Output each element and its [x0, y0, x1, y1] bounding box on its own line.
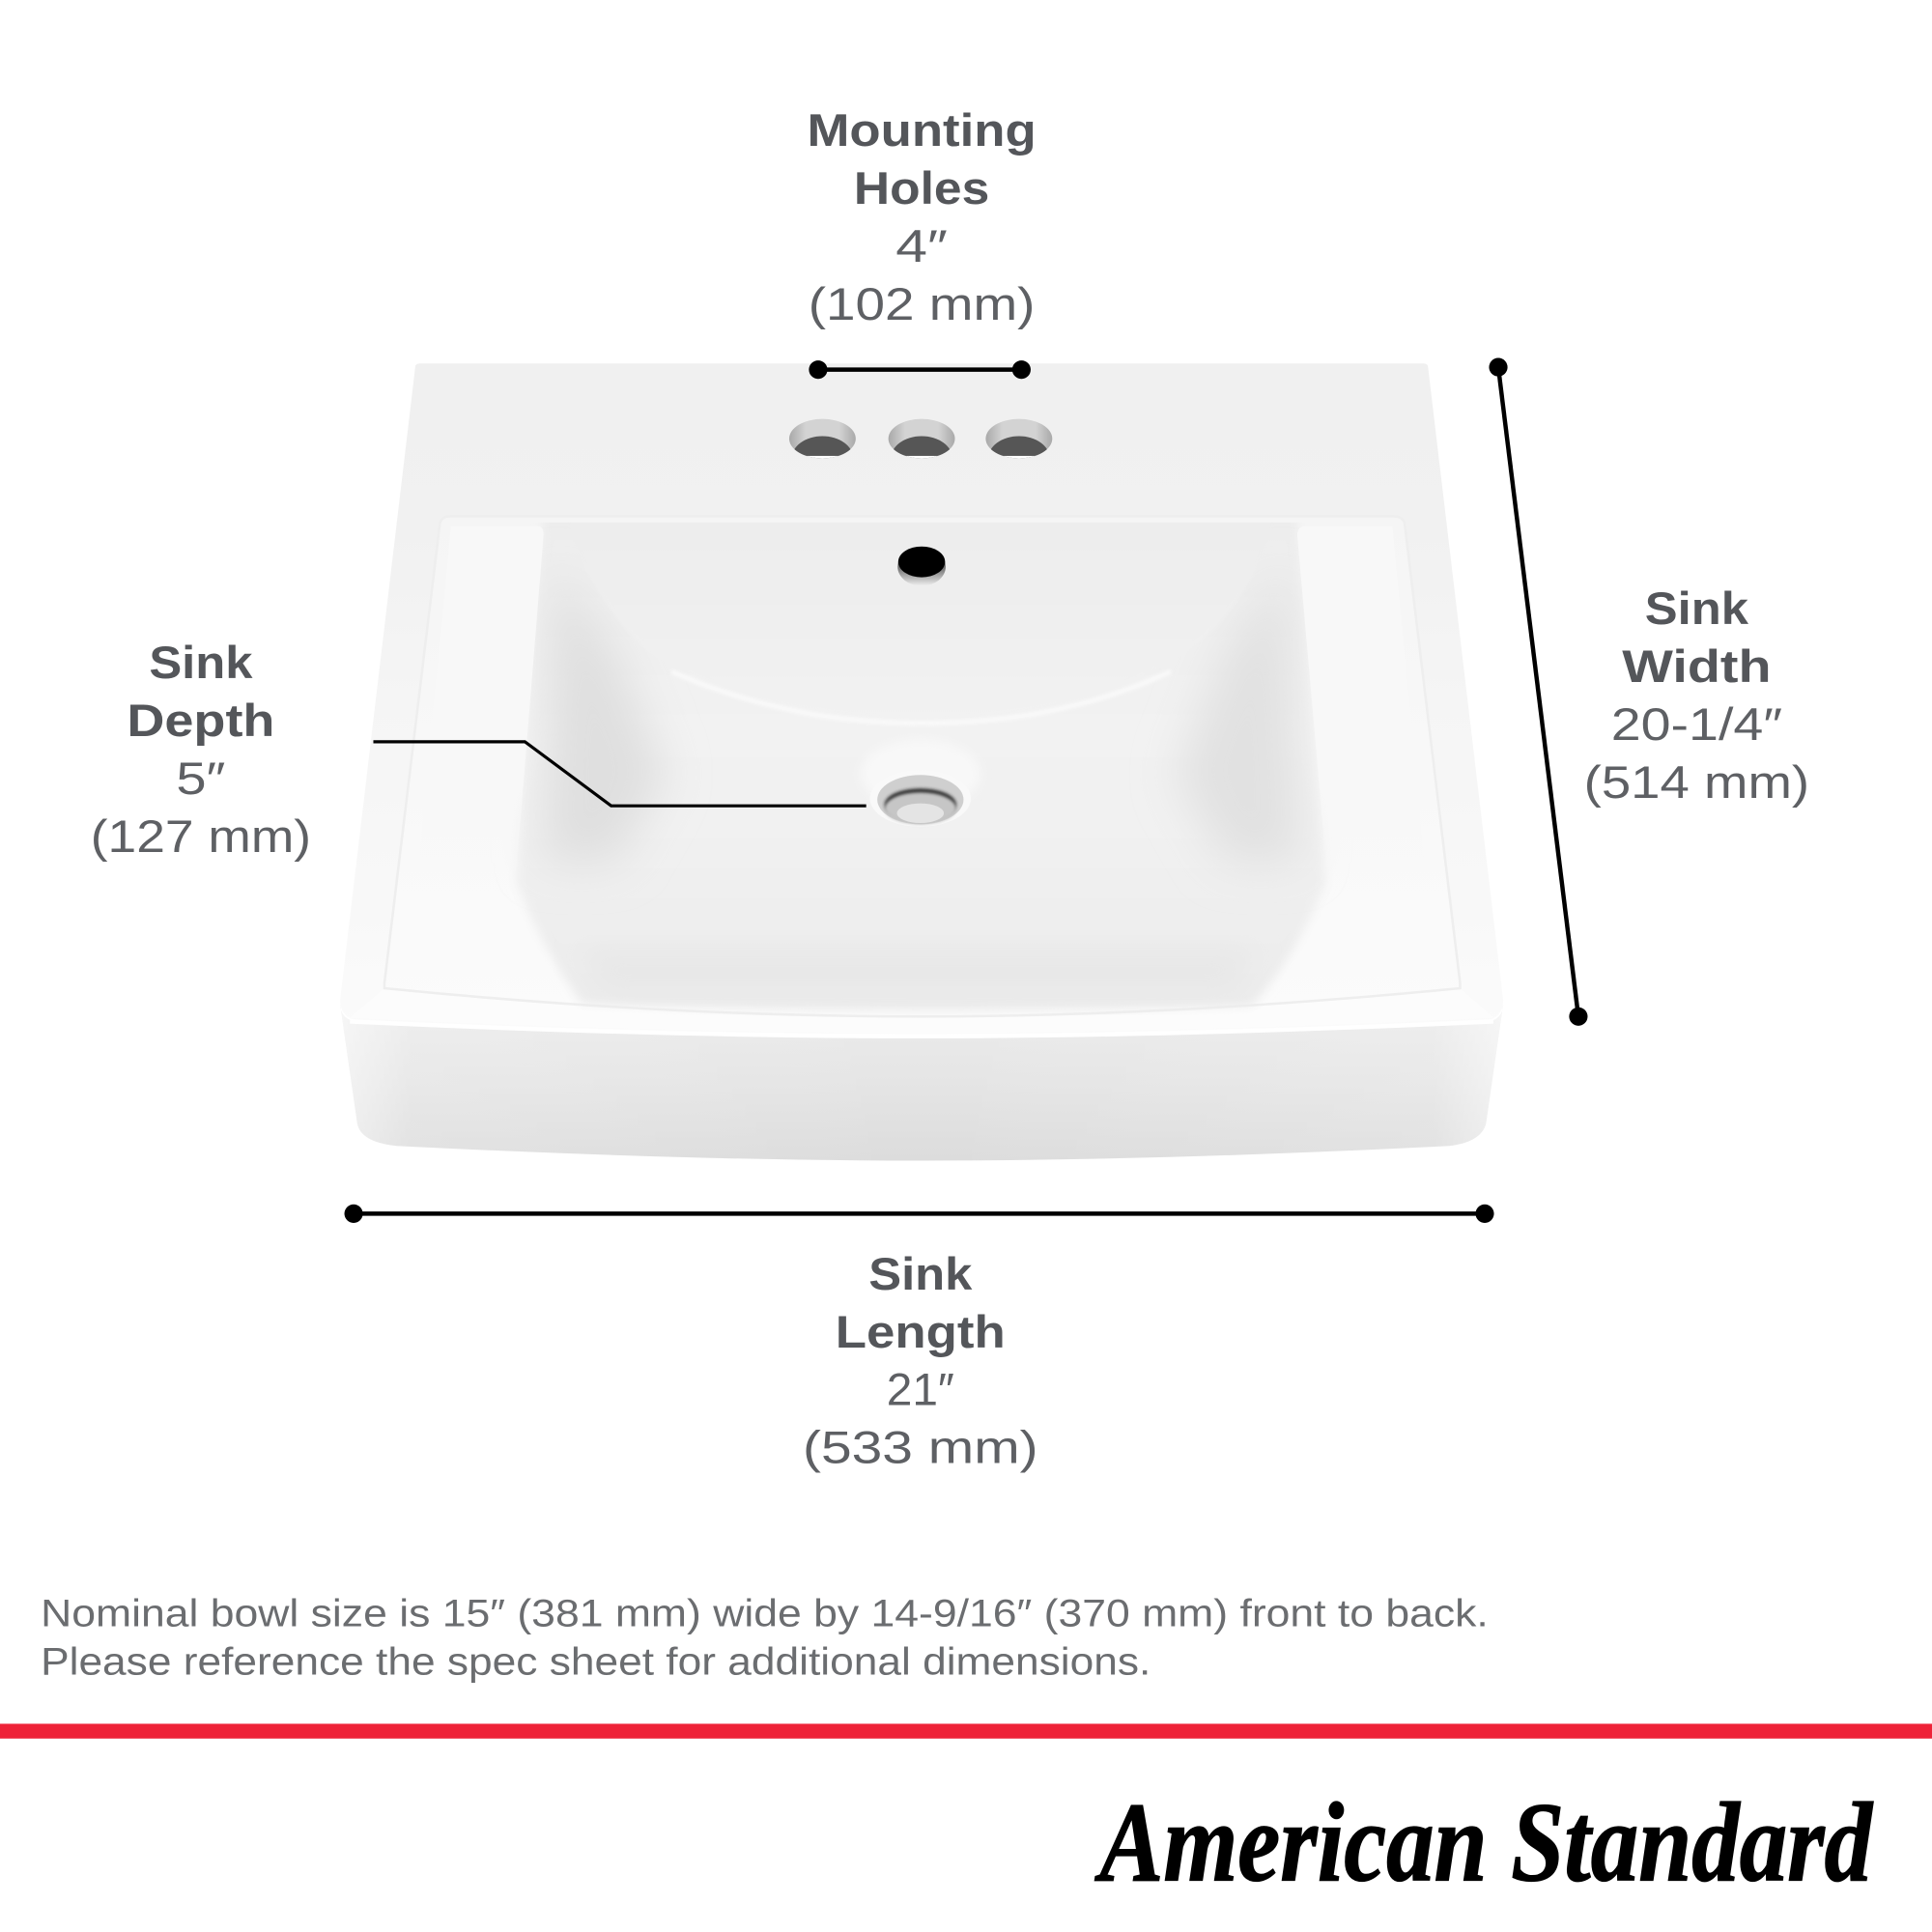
mounting hole left [789, 419, 856, 458]
back lip highlight [414, 381, 1430, 384]
recessed rim [384, 516, 1460, 1016]
label: sink depth: 5″ [176, 753, 225, 805]
mounting hole right [985, 419, 1053, 458]
red divider bar [0, 1723, 1932, 1739]
label: mounting holes: (102 mm) [809, 279, 1035, 330]
drain [860, 739, 980, 827]
back of bowl [560, 505, 1282, 720]
top rim highlight [443, 517, 1403, 521]
sink front face [340, 1005, 1503, 1161]
label: mounting holes: 4″ [895, 221, 948, 272]
footnote [41, 1593, 1489, 1683]
footnote: Nominal bowl size is 15″ (381 mm) wide by 14-9/16″ (370 mm) front to back. [41, 1593, 1489, 1635]
label: sink depth: Depth [127, 696, 274, 747]
overflow hole [897, 547, 946, 586]
label: sink length: (533 mm) [803, 1423, 1038, 1474]
label: sink depth [91, 638, 311, 863]
label: sink length: 21″ [887, 1365, 954, 1416]
dimension line: sink length [345, 1205, 1494, 1223]
label: sink depth: (127 mm) [91, 811, 311, 863]
dimension line: sink width [1489, 358, 1587, 1026]
label: sink depth: Sink [149, 638, 253, 689]
front rim highlight [350, 1021, 1493, 1037]
label: sink width: Width [1622, 641, 1772, 693]
label: sink width: Sink [1645, 583, 1749, 635]
label: sink width: 20-1/4″ [1611, 699, 1782, 751]
label: mounting holes [807, 105, 1037, 330]
mounting hole centre [889, 419, 954, 458]
right ledge top [1297, 526, 1427, 887]
bowl edge highlight [671, 671, 1171, 724]
label: sink length: Length [836, 1307, 1006, 1358]
left ledge top [416, 526, 544, 887]
label: sink width: (514 mm) [1584, 757, 1809, 809]
basin side shading [541, 611, 1298, 862]
label: sink width [1584, 583, 1809, 809]
sink illustration [340, 363, 1503, 1161]
label: sink length: Sink [868, 1249, 973, 1300]
footnote: Please reference the spec sheet for additional dimensions. [41, 1640, 1151, 1683]
sink top deck [340, 363, 1503, 1035]
lower basin shading [579, 949, 1257, 993]
basin [516, 493, 1325, 1010]
label: sink length [803, 1249, 1038, 1474]
label: mounting holes: Mounting [807, 105, 1037, 156]
dimension line: mounting holes [809, 360, 1031, 379]
label: mounting holes: Holes [854, 163, 989, 214]
front deck band [350, 989, 1493, 1033]
leader line: sink depth [373, 742, 867, 806]
